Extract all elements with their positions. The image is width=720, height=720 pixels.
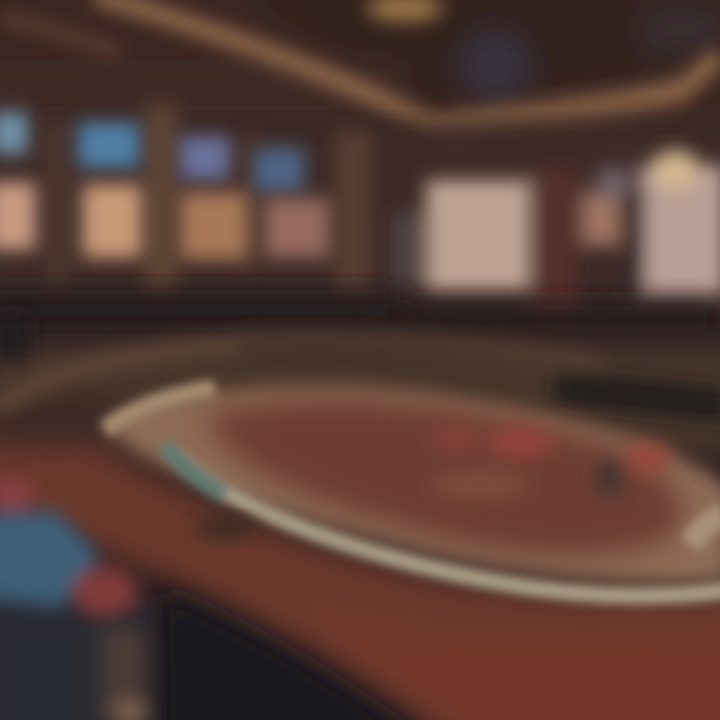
wood shadow spot bbox=[195, 516, 255, 540]
dark band under machines bbox=[0, 290, 720, 333]
foreground dark floor bbox=[160, 590, 430, 720]
table felt bbox=[105, 386, 720, 583]
back wall bbox=[0, 125, 720, 305]
table inner field bbox=[205, 399, 681, 556]
ceiling bbox=[0, 0, 720, 130]
outer rail bbox=[0, 315, 720, 421]
foreground chips left bbox=[0, 479, 155, 720]
right side bright screens bbox=[393, 150, 720, 316]
columns bbox=[45, 105, 371, 300]
table wood bbox=[0, 445, 720, 720]
table rim bbox=[105, 388, 720, 596]
slot machine lit panels bbox=[0, 182, 330, 260]
table chips bbox=[430, 426, 670, 500]
slot machine screens blue bbox=[0, 112, 304, 192]
ceiling beam bbox=[0, 0, 720, 145]
floor behind table bbox=[0, 345, 720, 460]
